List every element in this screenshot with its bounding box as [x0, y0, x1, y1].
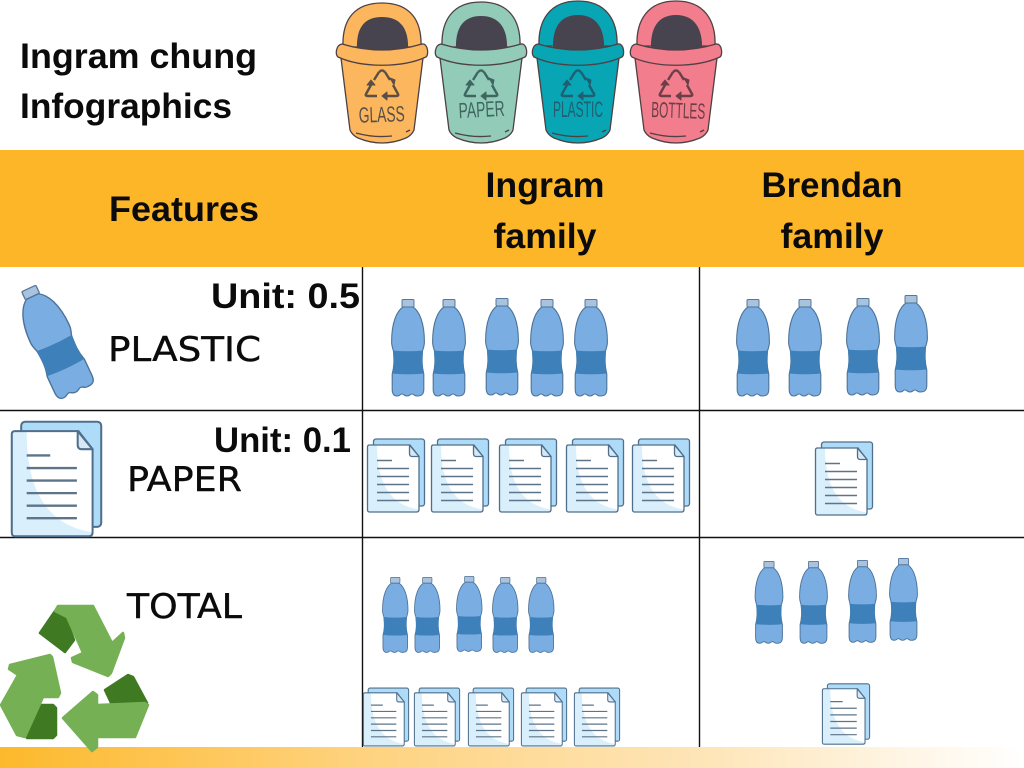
Brendan total bottles: [755, 558, 917, 643]
bin: paper: [435, 2, 527, 143]
row label: plastic: PLASTIC: [108, 330, 261, 370]
header: Ingram family: family: [494, 217, 597, 256]
Ingram total papers: [363, 688, 620, 746]
title: Ingram chung: [20, 37, 257, 76]
bottom gradient band: [0, 747, 1024, 768]
table grid lines: [0, 267, 1024, 747]
unit label: paper: Unit: 0.1: [214, 421, 351, 460]
bin: bottles: [630, 1, 722, 143]
icon: recycling arrows: [1, 606, 148, 751]
icon: large paper: [12, 422, 101, 536]
title: Infographics: [20, 87, 232, 126]
bin: glass: [336, 3, 428, 143]
bin: plastic: PLASTIC: [553, 97, 603, 122]
header: Brendan family: [762, 166, 902, 256]
bin: glass: GLASS: [358, 101, 405, 128]
header: Brendan family: Brendan: [762, 166, 902, 205]
recycling bins illustration: [336, 1, 722, 143]
table header band: [0, 150, 1024, 267]
header: Ingram family: [486, 166, 604, 256]
bin: plastic: [532, 1, 624, 143]
Brendan paper icon: [816, 442, 872, 515]
header: Ingram family: Ingram: [486, 166, 604, 205]
header: Brendan family: family: [780, 217, 884, 256]
row label: total: TOTAL: [126, 587, 242, 627]
icon: large plastic bottle: [9, 279, 96, 401]
Brendan plastic bottles: [737, 296, 927, 396]
Brendan total paper: [822, 684, 870, 744]
title: [20, 37, 257, 126]
unit label: plastic: Unit: 0.5: [211, 277, 360, 316]
Ingram total bottles: [382, 576, 554, 652]
Ingram plastic bottles: [392, 298, 607, 396]
Ingram paper icons: [368, 439, 690, 512]
bin: paper: PAPER: [458, 96, 505, 123]
header: features: Features: [109, 190, 259, 229]
row label: paper: PAPER: [127, 460, 242, 500]
bin: bottles: BOTTLES: [651, 97, 706, 124]
